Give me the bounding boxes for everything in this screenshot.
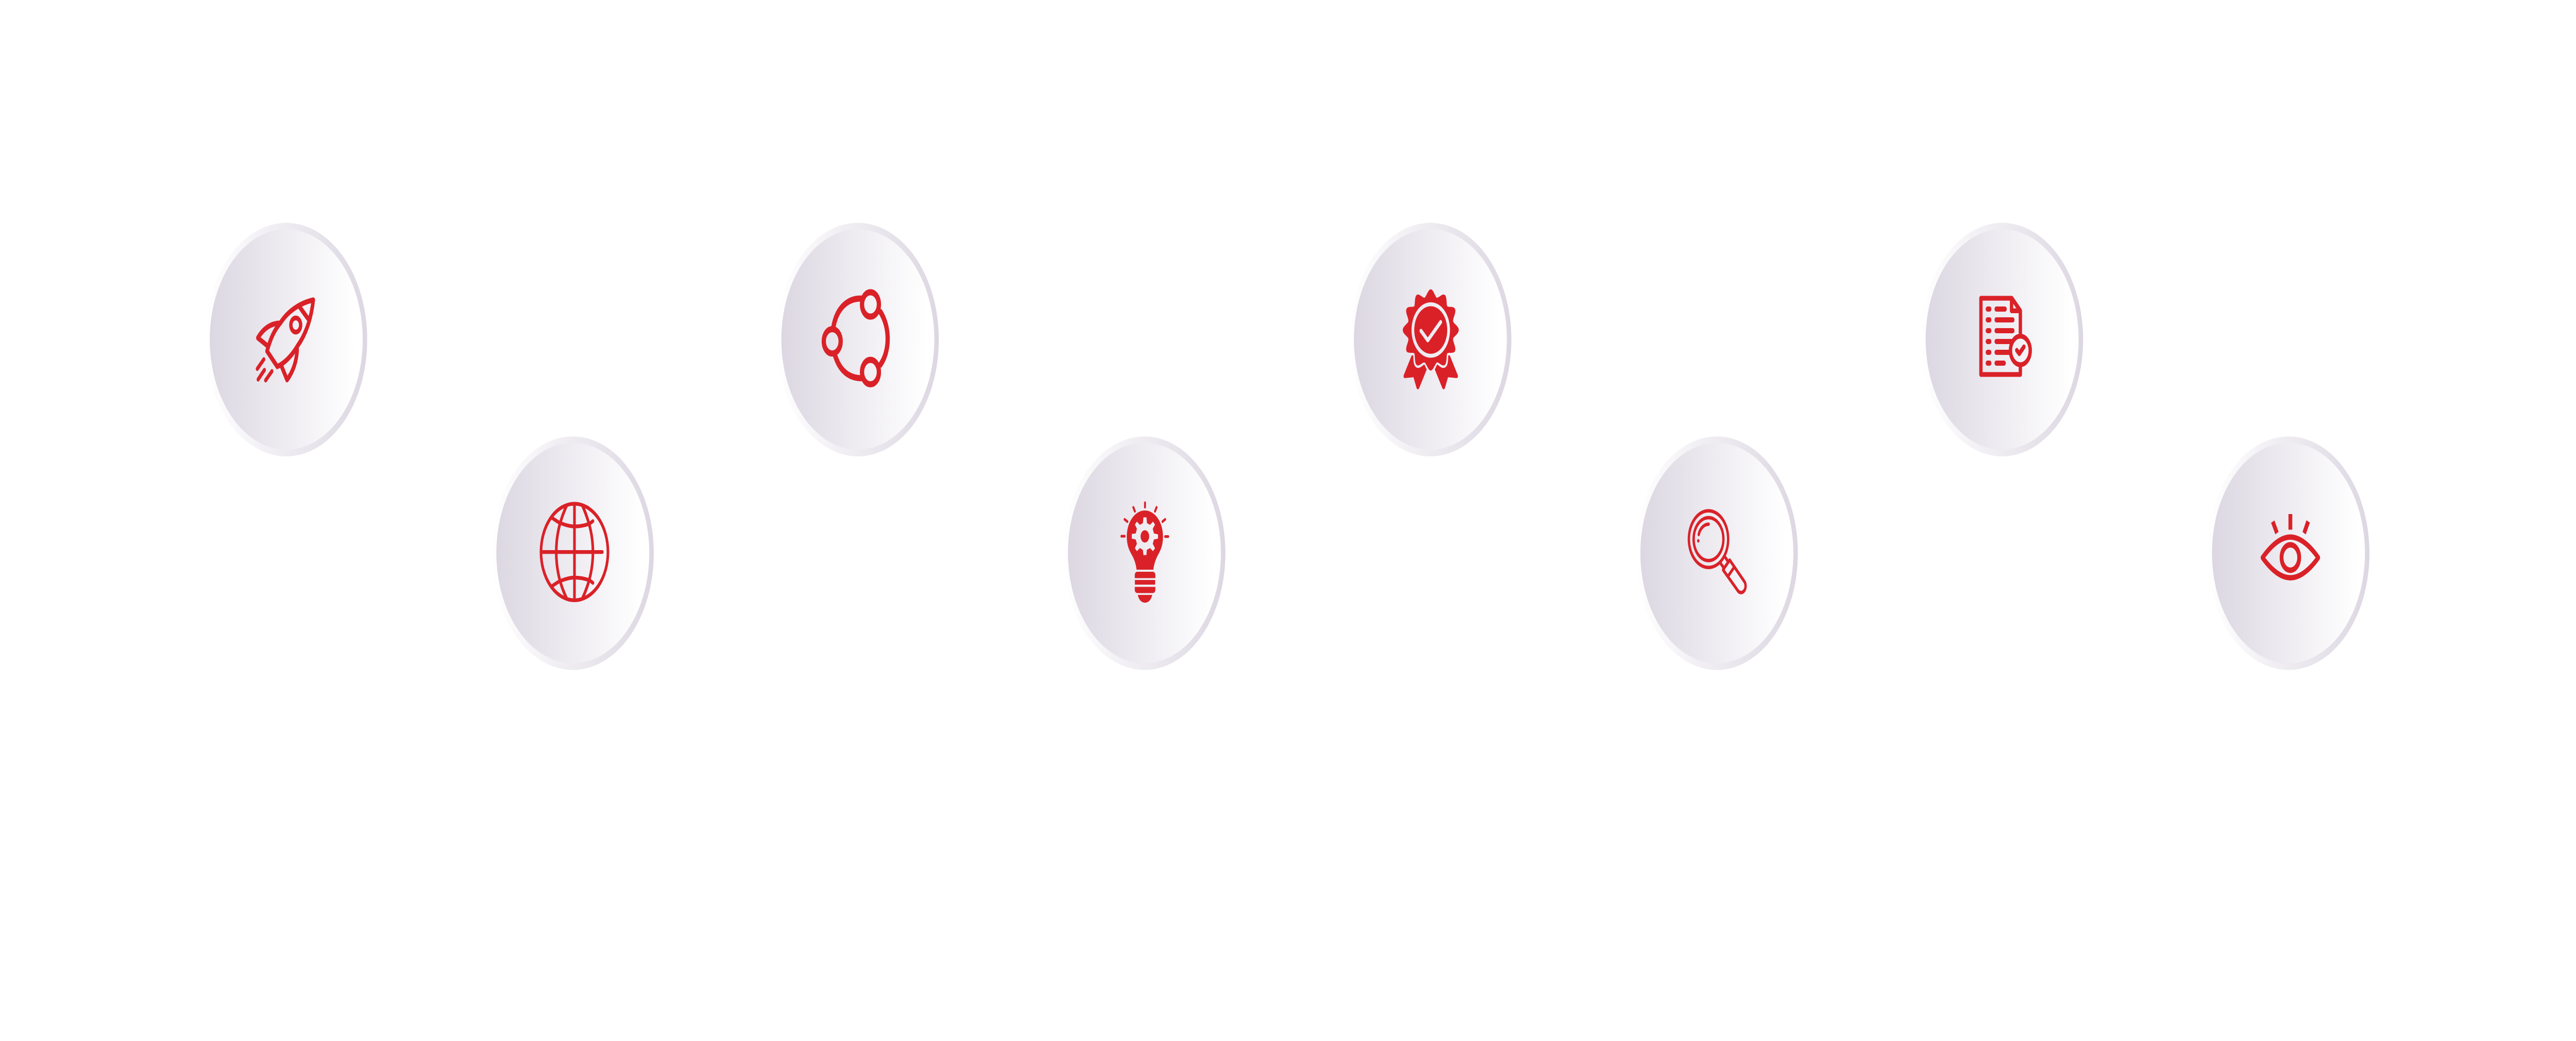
outer ring [1349, 223, 1512, 456]
badge: eye [2208, 436, 2369, 670]
icon: eye [2263, 514, 2318, 578]
icon: checked document [1981, 298, 2030, 374]
badge: connected nodes [777, 223, 939, 456]
outer ring [205, 223, 367, 456]
inner disc [1354, 229, 1507, 450]
outer ring [1636, 436, 1798, 670]
outer ring [2208, 436, 2369, 670]
badge: light bulb with gear [1063, 436, 1226, 670]
badge: award rosette [1349, 223, 1512, 456]
outer ring [777, 223, 939, 456]
outer ring [1921, 223, 2083, 456]
inner disc [210, 229, 363, 450]
inner disc [782, 229, 934, 450]
inner disc [1068, 443, 1221, 663]
inner disc [1640, 443, 1793, 663]
badge: magnifying glass [1636, 436, 1798, 670]
badge: rocket [205, 223, 367, 456]
inner disc [2212, 443, 2365, 663]
icon: magnifying glass [1689, 511, 1745, 592]
icon: connected nodes [824, 292, 888, 384]
icon: globe [541, 504, 608, 600]
inner disc [1926, 229, 2079, 450]
outer ring [1063, 436, 1226, 670]
icon: rocket [257, 300, 313, 380]
badge: globe [492, 436, 654, 670]
inner disc [496, 443, 649, 663]
badge: checked document [1921, 223, 2083, 456]
icon: light bulb with gear [1122, 503, 1168, 603]
icon: award rosette [1403, 289, 1459, 389]
outer ring [492, 436, 654, 670]
